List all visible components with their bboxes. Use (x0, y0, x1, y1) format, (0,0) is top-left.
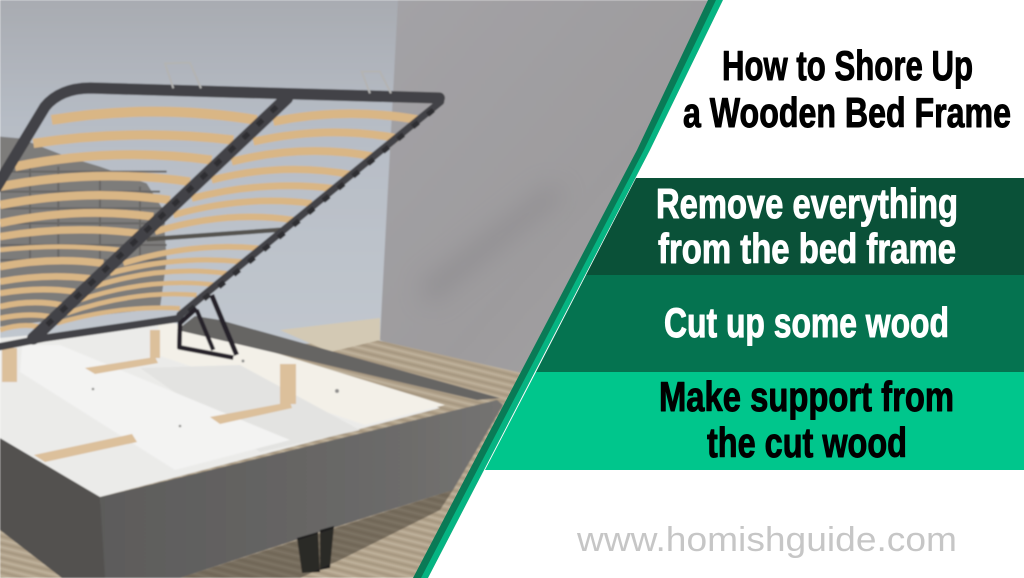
left section slats (0, 112, 420, 330)
bed base interior (0, 322, 445, 497)
website url: www.homishguide.com (576, 521, 957, 559)
headboard (0, 137, 167, 327)
bed back rim (177, 316, 500, 400)
floor (0, 340, 530, 578)
right wall (380, 0, 730, 400)
bed photo panel (0, 0, 730, 578)
diagonal accent stripe (413, 0, 723, 578)
title (683, 42, 1011, 136)
step band 3: make support: the cut wood (707, 419, 907, 466)
metal frame rails (0, 88, 441, 347)
step band 1: remove everything (586, 178, 1024, 275)
step band 2: cut up wood (536, 275, 1024, 372)
lift mechanism (179, 295, 237, 358)
white content panel (428, 0, 1024, 578)
lifted slatted frame (0, 63, 441, 358)
centre divider (20, 345, 290, 470)
bed legs (297, 526, 334, 573)
hooks (165, 63, 391, 93)
floor shadow (180, 490, 453, 578)
right section slats (273, 114, 420, 122)
left wall (0, 0, 402, 350)
baseboard (280, 318, 380, 352)
bed left panel (0, 438, 105, 578)
screw dots (92, 360, 339, 427)
slatted floor shadow (140, 365, 360, 452)
rail notches (40, 107, 433, 332)
cross brace (147, 229, 287, 239)
step band 3: make support (485, 372, 1024, 470)
wooden supports (2, 330, 296, 462)
bed front panel (100, 400, 503, 578)
wall shadow (420, 185, 565, 305)
back inner wall (158, 322, 445, 425)
